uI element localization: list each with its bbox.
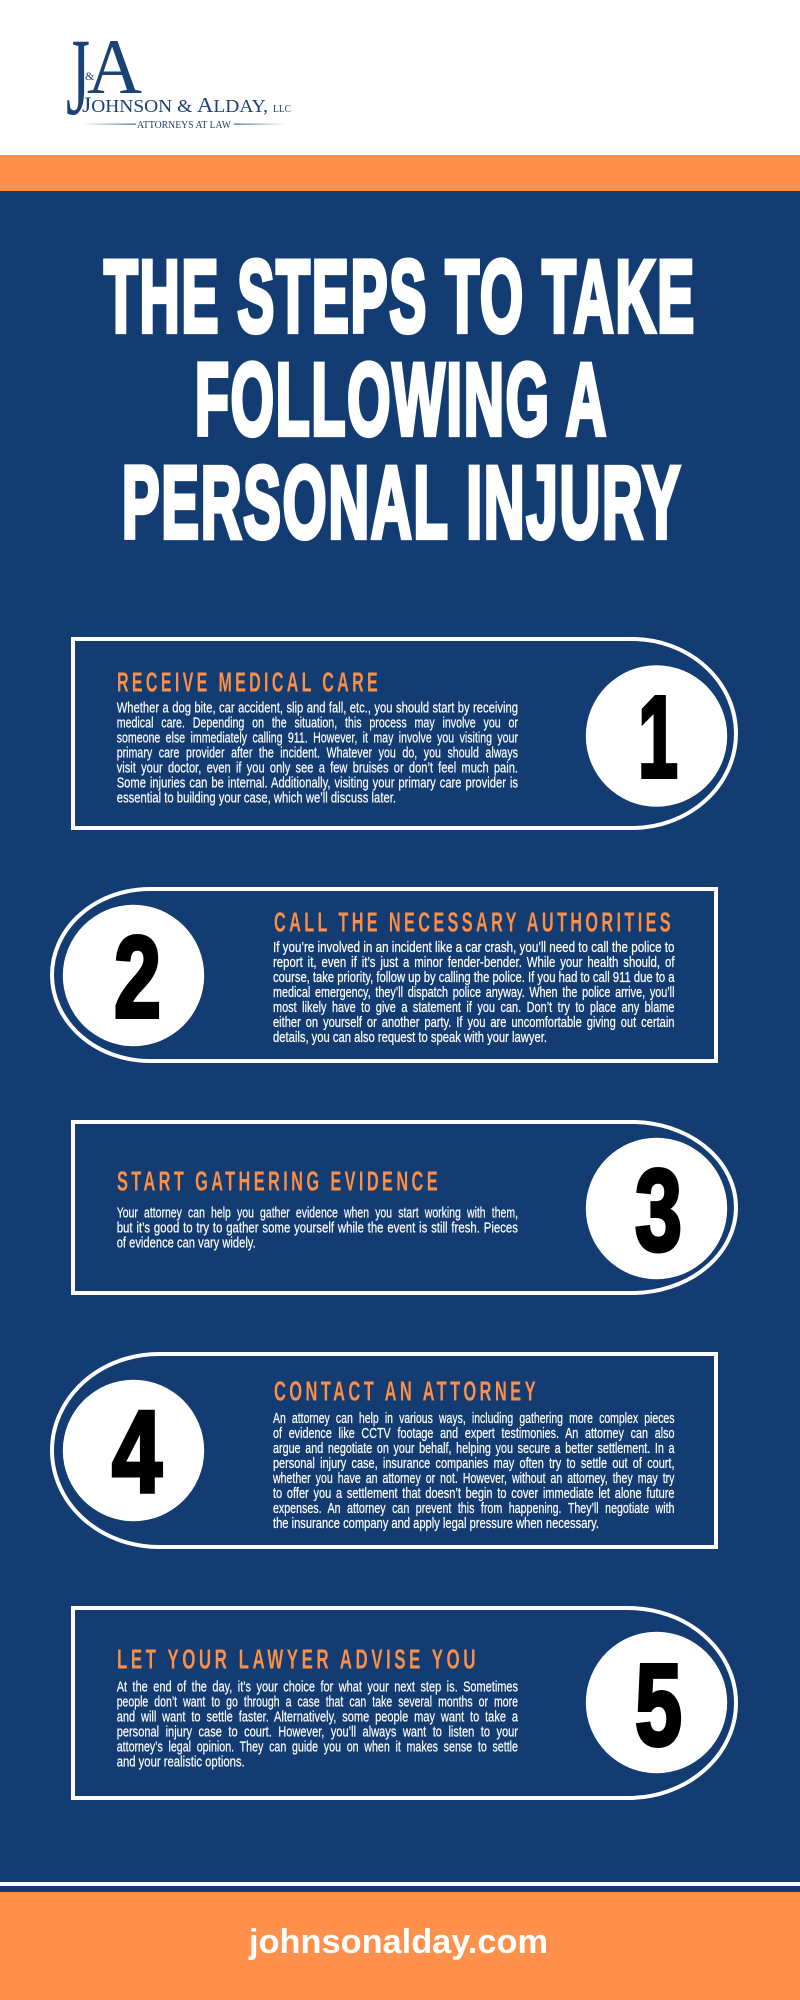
body text: attorney’s legal opinion. They can guide you on when it makes sense to settle [117, 1740, 518, 1756]
body text: primary care provider after the incident. Whatever you do, you should always [117, 746, 518, 762]
number badge 2: 2 [114, 912, 161, 1042]
heading: CONTACT AN ATTORNEY [274, 1375, 539, 1407]
body text: but it’s good to try to gather some yourself while the event is still fresh. Pieces [117, 1221, 518, 1237]
body text [117, 701, 518, 807]
number badge 5 [586, 1632, 727, 1773]
panel: step 4 contact an attorney [50, 1352, 718, 1549]
body text: most likely have to give a statement if you can. Don’t try to place any blame [273, 999, 675, 1015]
number badge 1 [586, 665, 727, 807]
heading: START GATHERING EVIDENCE [117, 1165, 441, 1197]
panel outline [73, 1122, 736, 1293]
title: FOLLOWING A [195, 343, 608, 456]
panel: step 5 let your lawyer advise you [71, 1606, 738, 1800]
body text: to offer you a settlement that doesn’t begin to cover immediate let alone future [273, 1485, 675, 1501]
footer band [0, 1892, 800, 2000]
body text: the insurance company and apply legal pressure when necessary. [273, 1515, 599, 1531]
logo: Johnson & Alday: & [85, 69, 95, 83]
body text: medical emergency, they’ll dispatch police anyway. When the police arrive, you’ll [273, 984, 674, 1000]
body text: essential to building your case, which we’ll discuss later. [117, 791, 396, 807]
body text: medical care. Depending on the situation, this process may involve you or [117, 716, 518, 732]
body text: people don’t want to go through a case that can take several months or more [117, 1695, 518, 1711]
title [103, 240, 696, 559]
body text: details, you can also request to speak with your lawyer. [273, 1029, 547, 1045]
body text: of evidence like CCTV footage and expert testimonies. An attorney can also [273, 1425, 675, 1441]
number badge 4 [63, 1380, 204, 1521]
body text: personal injury case, insurance companies may often try to settle out of court, [273, 1455, 674, 1471]
title: PERSONAL INJURY [122, 446, 682, 559]
orange band under header [0, 155, 800, 191]
number badge 2 [63, 905, 204, 1046]
heading: CALL THE NECESSARY AUTHORITIES [274, 906, 674, 938]
logo: Johnson & Alday [66, 16, 291, 138]
body text: and will want to settle faster. Alternatively, some people may want to take a [117, 1710, 519, 1726]
logo: Johnson & Alday: J [66, 16, 90, 138]
body text: someone else immediately calling 911. However, it may involve you visiting your [117, 731, 518, 747]
body text: At the end of the day, it’s your choice for what your next step is. Sometimes [117, 1680, 518, 1696]
logo: Johnson & Alday: A [87, 23, 142, 110]
body text [117, 1206, 518, 1252]
number badge 1: 1 [638, 672, 678, 802]
logo: Johnson & Alday: ATTORNEYS AT LAW [137, 120, 231, 131]
body text: and your realistic options. [117, 1755, 245, 1771]
title: THE STEPS TO TAKE [104, 240, 696, 353]
heading: LET YOUR LAWYER ADVISE YOU [117, 1643, 479, 1675]
body text: personal injury case to court. However, you’ll always want to listen to your [117, 1725, 518, 1741]
body text: visit your doctor, even if you only see a few bruises or don’t feel much pain. [117, 761, 518, 777]
body text: expenses. An attorney can prevent this from happening. They’ll negotiate with [273, 1500, 674, 1516]
panel outline [73, 1608, 736, 1798]
body text: report it, even if it’s just a minor fender-bender. While your health should, of [273, 954, 675, 970]
body text: course, take priority, follow up by calling the police. If you had to call 911 due to a [273, 969, 675, 985]
panel: step 1 receive medical care [71, 637, 738, 830]
logo: Johnson & Alday: JOHNSON & ALDAY, [82, 92, 268, 117]
number badge 4: 4 [112, 1387, 162, 1517]
number badge 3 [586, 1138, 727, 1279]
body text: either on yourself or another party. If you are uncomfortable giving out certain [273, 1014, 674, 1030]
body text [272, 1410, 675, 1531]
logo: Johnson & Alday: LLC [273, 104, 291, 115]
body text: of evidence can vary widely. [117, 1236, 256, 1252]
body text [117, 1680, 519, 1771]
website url: johnsonalday.com [248, 1923, 548, 1961]
panel outline [52, 889, 716, 1061]
body text: Some injuries can be internal. Additionally, visiting your primary care provider is [117, 776, 518, 792]
number badge 3: 3 [635, 1145, 682, 1275]
body text [273, 939, 675, 1045]
body text: Whether a dog bite, car accident, slip and fall, etc., you should start by receiving [117, 701, 518, 717]
panel: step 2 call the necessary authorities [50, 887, 718, 1063]
body text: If you’re involved in an incident like a car crash, you’ll need to call the police to [273, 939, 675, 955]
body text: An attorney can help in various ways, including gathering more complex pieces [273, 1410, 675, 1426]
body text: Your attorney can help you gather evidence when you start working with them, [117, 1206, 518, 1222]
body text: whether you have an attorney or not. However, without an attorney, they may try [272, 1470, 675, 1486]
footer divider line [0, 1882, 800, 1886]
panel: step 3 start gathering evidence [71, 1120, 738, 1295]
body text: argue and negotiate on your behalf, helping you secure a better settlement. In a [273, 1440, 675, 1456]
number badge 5: 5 [635, 1640, 682, 1770]
panel outline [73, 639, 736, 828]
heading: RECEIVE MEDICAL CARE [117, 666, 381, 698]
header: white logo band [0, 0, 800, 155]
panel outline [52, 1354, 716, 1547]
